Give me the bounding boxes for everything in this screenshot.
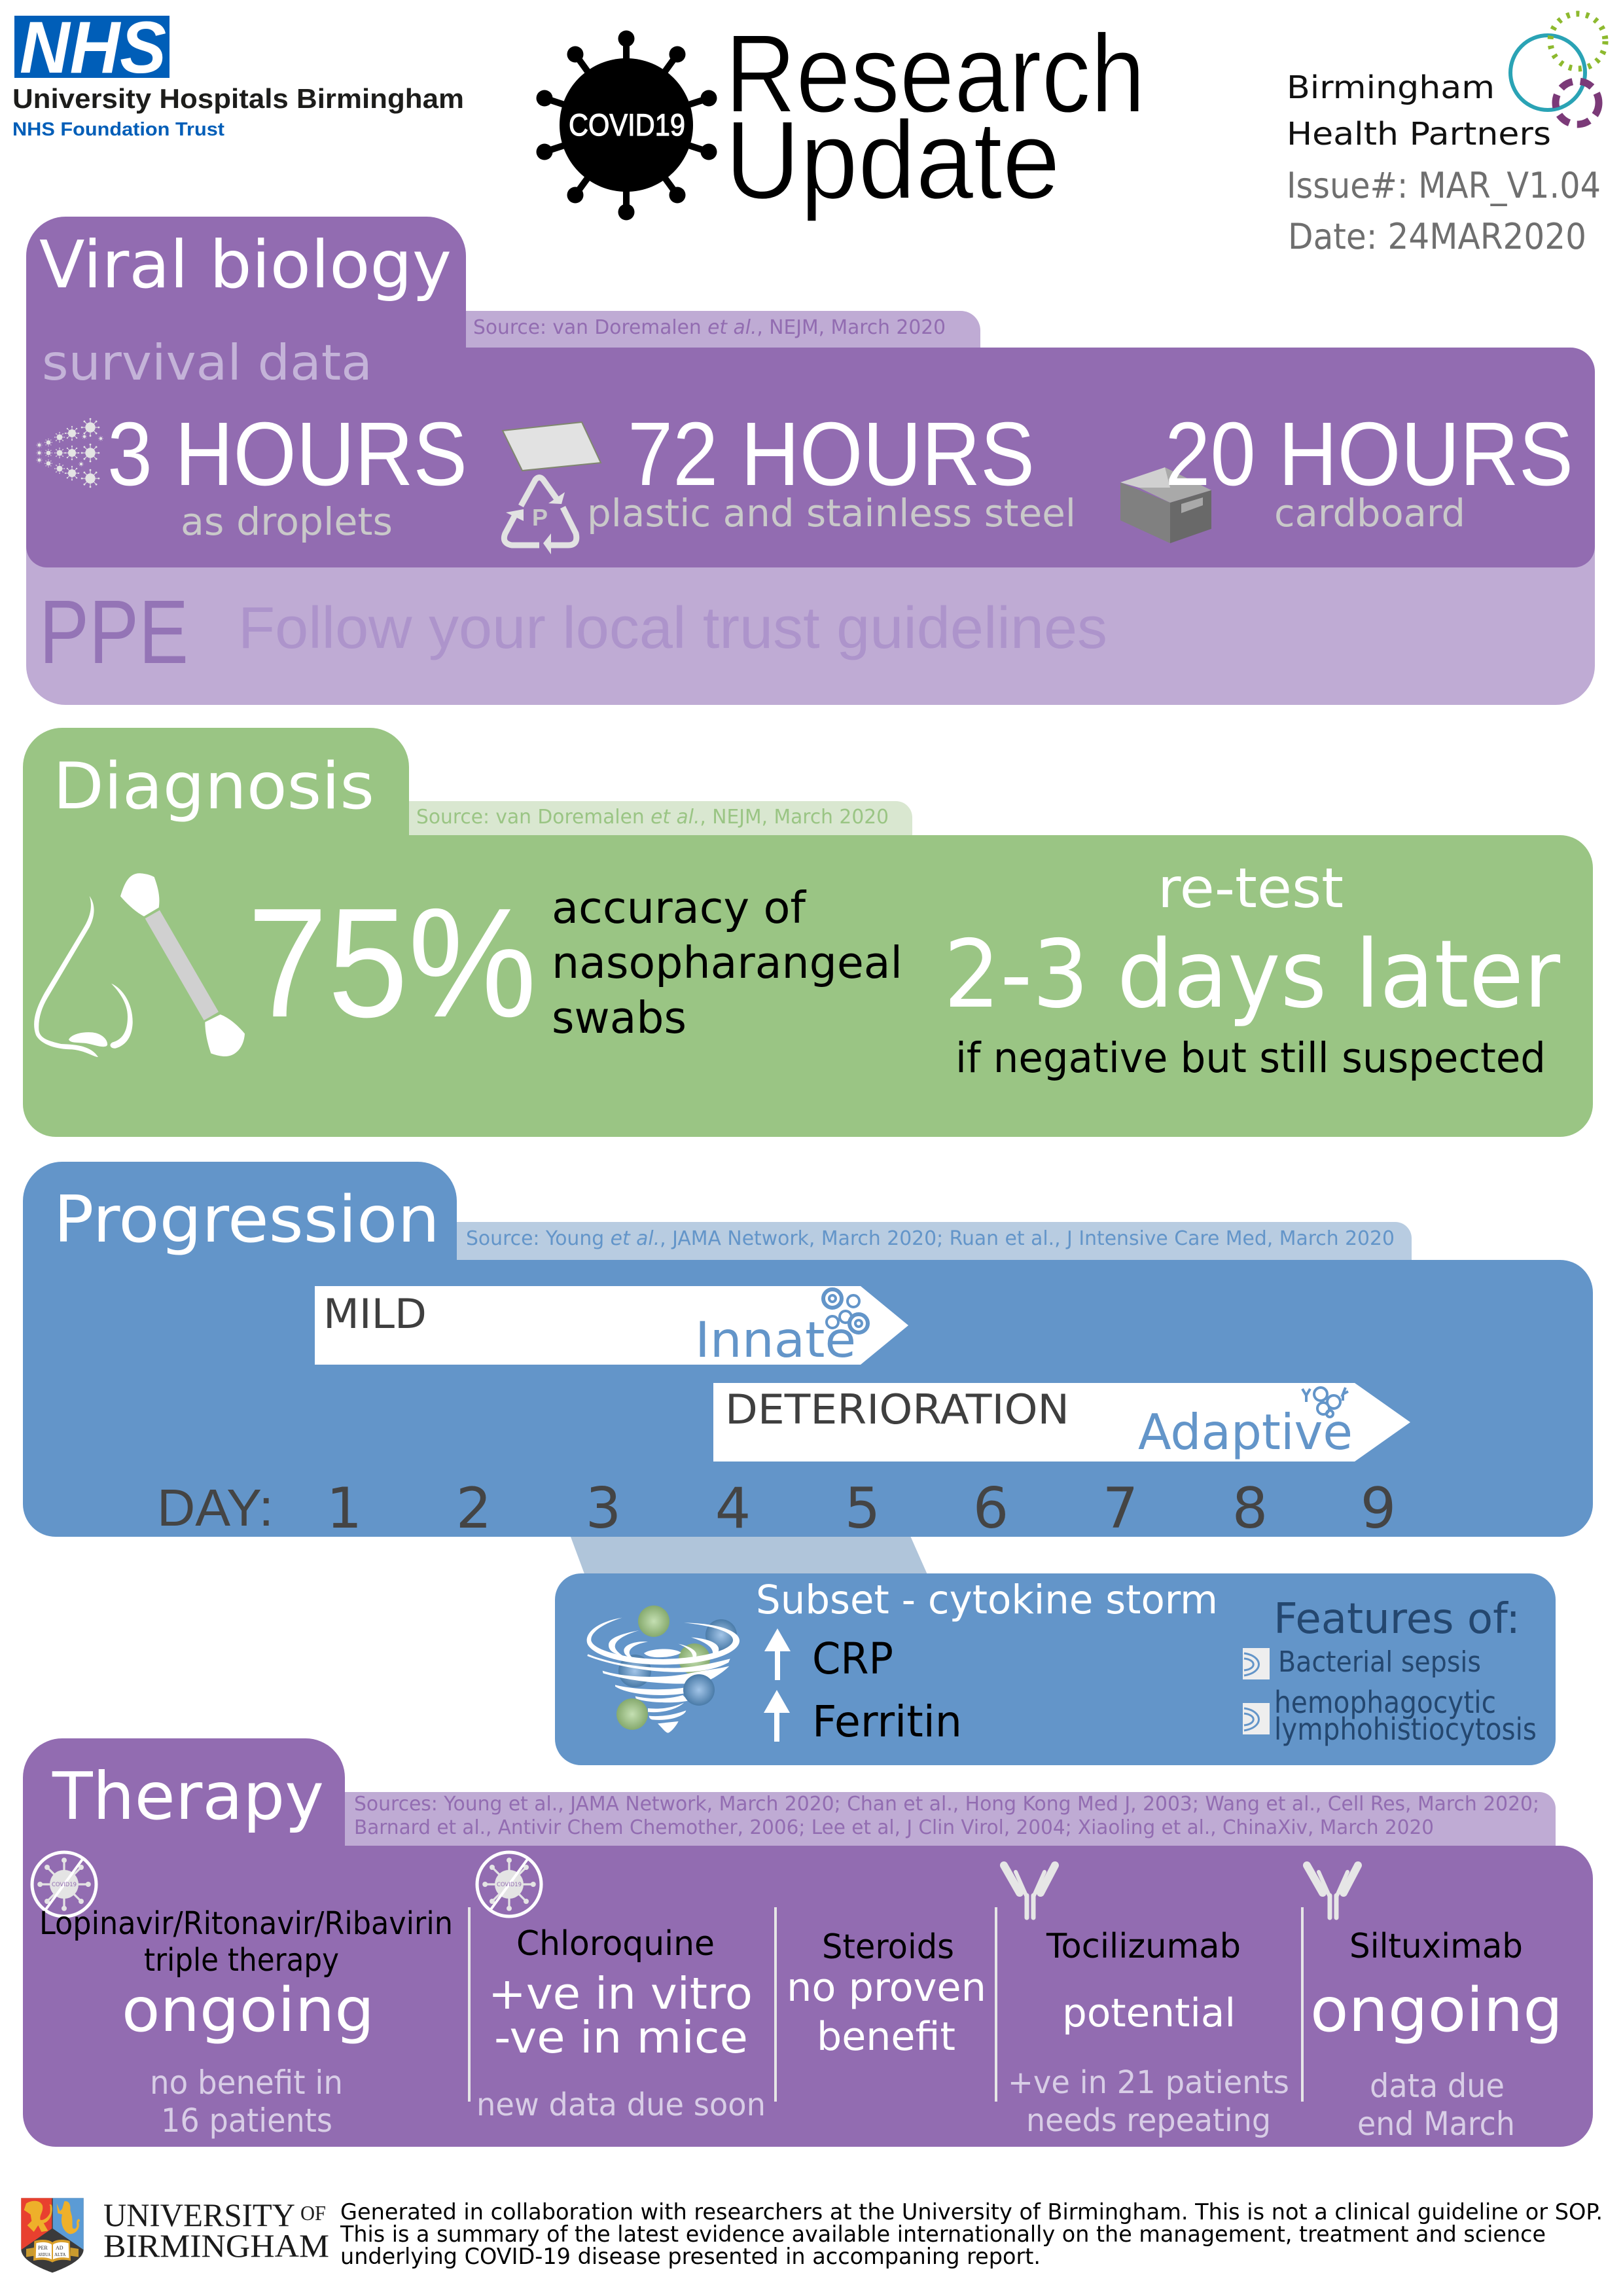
day axis: 8	[1232, 1476, 1268, 1541]
stat: 3 hours as droplets: 3 HOURS	[107, 404, 467, 505]
source tab	[466, 311, 980, 348]
wordmark: University of Birmingham	[103, 2197, 329, 2264]
day axis: DAY:	[157, 1479, 274, 1537]
panel: diagnosis	[23, 728, 1593, 1137]
therapy: Tocilizumab	[1008, 1927, 1289, 2139]
sources: Sources: Young et al., JAMA Network, March 2020; Chan et al., Hong Kong Med J, 2003; Wang et al., Cell Res, March 2020;	[354, 1793, 1539, 1816]
title: Research Update	[725, 12, 1145, 223]
icon: droplets	[36, 418, 103, 488]
features heading: Features of:	[1274, 1595, 1520, 1643]
stat: 72 hours on plastic and stainless steel: 72 HOURS	[628, 404, 1035, 505]
therapy: Lopinavir/Ritonavir/Ribavirin: 16 patients	[161, 2102, 332, 2140]
day axis: 6	[973, 1476, 1008, 1541]
heading: Diagnosis	[53, 749, 374, 824]
disclaimer text: Generated in collaboration with researchers at the University of Birmingham. This is not a clinical guideline or SOP.	[340, 2199, 1603, 2225]
therapy: Steroids	[787, 1928, 986, 2060]
logo: NHS University Hospitals Birmingham: University Hospitals Birmingham	[12, 83, 464, 114]
heading: Viral biology	[39, 226, 452, 303]
arrow: Ferritin up	[764, 1690, 790, 1742]
therapy: Lopinavir/Ritonavir/Ribavirin: triple therapy	[144, 1942, 339, 1979]
feature: hemophagocytic lymphohistiocytosis: lymphohistiocytosis	[1274, 1712, 1537, 1747]
re-test callout: if negative but still suspected	[955, 1034, 1546, 1082]
marker: CRP: CRP	[812, 1634, 893, 1684]
disclaimer text	[340, 2199, 1603, 2270]
therapy: Siltuximab: ongoing	[1310, 1975, 1563, 2045]
icon: swab	[120, 873, 245, 1056]
therapy: Chloroquine: new data due soon	[476, 2087, 766, 2123]
logo: Birmingham Health Partners: Health Partners	[1287, 116, 1551, 152]
re-test callout: 2-3 days later	[944, 920, 1560, 1029]
feature: hemophagocytic lymphohistiocytosis	[1243, 1685, 1537, 1747]
icon: COVID19 virus: COVID19	[569, 107, 685, 142]
source: Source: van Doremalen et al., NEJM, March 2020	[473, 316, 946, 339]
logo: NHS University Hospitals Birmingham: NHS	[20, 7, 166, 88]
icon: cytokine tornado	[587, 1605, 740, 1733]
therapy: Lopinavir/Ritonavir/Ribavirin: no benefit in	[150, 2064, 343, 2102]
therapy: Steroids: Steroids	[822, 1928, 954, 1967]
accuracy description: swabs	[552, 992, 687, 1043]
icon: plastic sheet	[503, 422, 601, 471]
icon: antibody	[1004, 1865, 1055, 1918]
day axis	[157, 1476, 1396, 1541]
therapy: Tocilizumab: Tocilizumab	[1046, 1927, 1241, 1966]
icon: COVID19 virus	[537, 30, 717, 220]
panel: therapy	[23, 1738, 1593, 2147]
therapy: Steroids: no proven	[787, 1965, 986, 2011]
panel: progression	[23, 1162, 1593, 1577]
stat: 3 hours as droplets: as droplets	[181, 499, 393, 544]
source tab	[457, 1222, 1412, 1260]
logo: University of Birmingham crest: AD	[56, 2245, 63, 2251]
arrow: mild innate	[315, 1286, 908, 1369]
sources	[354, 1793, 1539, 1839]
source: Source: Young et al., JAMA Network, March 2020; Ruan et al., J Intensive Care Med, March 2020	[466, 1227, 1395, 1250]
arrow: mild innate: MILD	[323, 1290, 427, 1338]
date: Date: 24MAR2020	[1288, 216, 1586, 257]
disclaimer text: This is a summary of the latest evidence available internationally on the management, treatment and science	[340, 2221, 1546, 2248]
therapy: Tocilizumab: needs repeating	[1026, 2102, 1271, 2139]
panel shape	[23, 1162, 1593, 1537]
icon: recycling symbol	[504, 478, 577, 554]
day axis: 3	[586, 1476, 621, 1541]
icon: antiviral: COVID19	[52, 1882, 77, 1888]
source tab	[409, 801, 912, 835]
title: Research Update: Update	[725, 98, 1060, 223]
panel: viral biology	[26, 217, 1595, 567]
marker: Ferritin: Ferritin	[812, 1696, 962, 1747]
therapy: Siltuximab: Siltuximab	[1349, 1927, 1523, 1966]
heading: Therapy	[52, 1758, 324, 1835]
sources tab	[345, 1792, 1556, 1846]
PPE guidance: Follow your local trust guidelines	[238, 596, 1107, 661]
stat: 3 hours as droplets	[107, 404, 467, 544]
wordmark: University of Birmingham: UNIVERSITY	[103, 2197, 295, 2233]
stat: 75%: 75%	[247, 876, 537, 1050]
stat: 72 hours on plastic and stainless steel	[587, 404, 1076, 535]
day axis: 1	[327, 1476, 362, 1541]
logo: Birmingham Health Partners: Birmingham	[1287, 69, 1495, 106]
logo: University of Birmingham crest: ALTA	[54, 2252, 65, 2257]
wordmark: University of Birmingham: BIRMINGHAM	[103, 2227, 329, 2264]
logo: University of Birmingham crest	[21, 2198, 84, 2272]
arrow: deterioration adaptive	[713, 1383, 1410, 1462]
icon: adaptive cells	[1302, 1388, 1348, 1417]
PPE heading: PPE	[39, 582, 188, 683]
day axis: 9	[1361, 1476, 1396, 1541]
source: Source: van Doremalen et al., NEJM, March 2020	[416, 806, 889, 829]
therapy: Tocilizumab: +ve in 21 patients	[1008, 2064, 1289, 2101]
arrow: mild innate: Innate	[695, 1311, 856, 1369]
re-test callout	[944, 856, 1560, 1082]
accuracy description: nasopharangeal	[552, 937, 902, 988]
therapy: Chloroquine: +ve in vitro	[488, 1968, 753, 2019]
icon: antibody	[1307, 1865, 1358, 1918]
therapy: Siltuximab: data due	[1370, 2067, 1505, 2105]
panel: PPE	[26, 458, 1595, 705]
day axis: 7	[1103, 1476, 1138, 1541]
feature: hemophagocytic lymphohistiocytosis: hemophagocytic	[1274, 1685, 1496, 1720]
arrow: deterioration adaptive: Adaptive	[1138, 1403, 1353, 1461]
column dividers	[469, 1907, 1302, 2102]
therapy: Tocilizumab: potential	[1062, 1990, 1236, 2036]
panel shape	[26, 217, 1595, 567]
therapy: Steroids: benefit	[817, 2014, 955, 2060]
accuracy description: accuracy of	[552, 882, 806, 933]
disclaimer text: underlying COVID-19 disease presented in accompaning report.	[340, 2244, 1041, 2270]
day axis: 2	[456, 1476, 491, 1541]
day axis: 5	[845, 1476, 880, 1541]
heading: Subset - cytokine storm	[756, 1577, 1218, 1623]
logo: NHS University Hospitals Birmingham: NHS Foundation Trust	[12, 119, 224, 140]
stat: 20 hours on cardboard: cardboard	[1274, 491, 1465, 535]
survival data label: survival data	[42, 334, 372, 391]
arrow: CRP up	[764, 1628, 791, 1680]
logo: University of Birmingham crest: PER	[38, 2245, 48, 2251]
connector to subset panel	[569, 1532, 929, 1577]
header	[12, 7, 1605, 257]
stat: 72 hours on plastic and stainless steel: plastic and stainless steel	[587, 491, 1076, 535]
logo: NHS University Hospitals Birmingham	[12, 7, 464, 140]
footer	[21, 2197, 1603, 2272]
therapy: Lopinavir/Ritonavir/Ribavirin	[39, 1905, 453, 2140]
logo: Birmingham Health Partners	[1287, 14, 1605, 152]
icon: recycling symbol: P	[532, 504, 548, 531]
icon: antiviral: COVID19	[497, 1882, 522, 1888]
icon: nose	[34, 896, 133, 1057]
wordmark: University of Birmingham: OF	[300, 2201, 326, 2225]
re-test callout: re-test	[1158, 856, 1344, 920]
therapy: Siltuximab	[1310, 1927, 1563, 2143]
therapy: Lopinavir/Ritonavir/Ribavirin: Lopinavir/Ritonavir/Ribavirin	[39, 1905, 453, 1942]
icon: antiviral	[32, 1852, 96, 1916]
sources: Barnard et al., Antivir Chem Chemother, 2006; Lee et al, J Clin Virol, 2004; Xiaoling et al., ChinaXiv, March 2020	[354, 1816, 1434, 1839]
therapy: Chloroquine: -ve in mice	[494, 2012, 748, 2063]
accuracy description	[552, 882, 902, 1043]
therapy: Chloroquine	[476, 1924, 766, 2123]
day axis: 4	[715, 1476, 751, 1541]
therapy: Lopinavir/Ritonavir/Ribavirin: ongoing	[122, 1975, 374, 2045]
therapy: Siltuximab: end March	[1357, 2105, 1515, 2143]
panel shape	[23, 1738, 1593, 2147]
issue number: Issue#: MAR_V1.04	[1287, 165, 1601, 206]
icon: innate cells	[823, 1289, 868, 1333]
icon: cardboard box	[1120, 467, 1211, 543]
panel: cytokine storm subset	[555, 1573, 1556, 1765]
icon: antiviral	[477, 1852, 541, 1916]
panel shape	[23, 728, 1593, 1137]
arrow: deterioration adaptive: DETERIORATION	[725, 1386, 1069, 1433]
therapy: Chloroquine: Chloroquine	[516, 1924, 715, 1964]
stat: 20 hours on cardboard: 20 HOURS	[1165, 404, 1573, 505]
heading: Progression	[54, 1183, 440, 1257]
feature: bacterial sepsis: Bacterial sepsis	[1278, 1645, 1481, 1679]
logo: University of Birmingham crest: ARDUA	[38, 2252, 50, 2257]
title: Research Update: Research	[725, 12, 1145, 136]
